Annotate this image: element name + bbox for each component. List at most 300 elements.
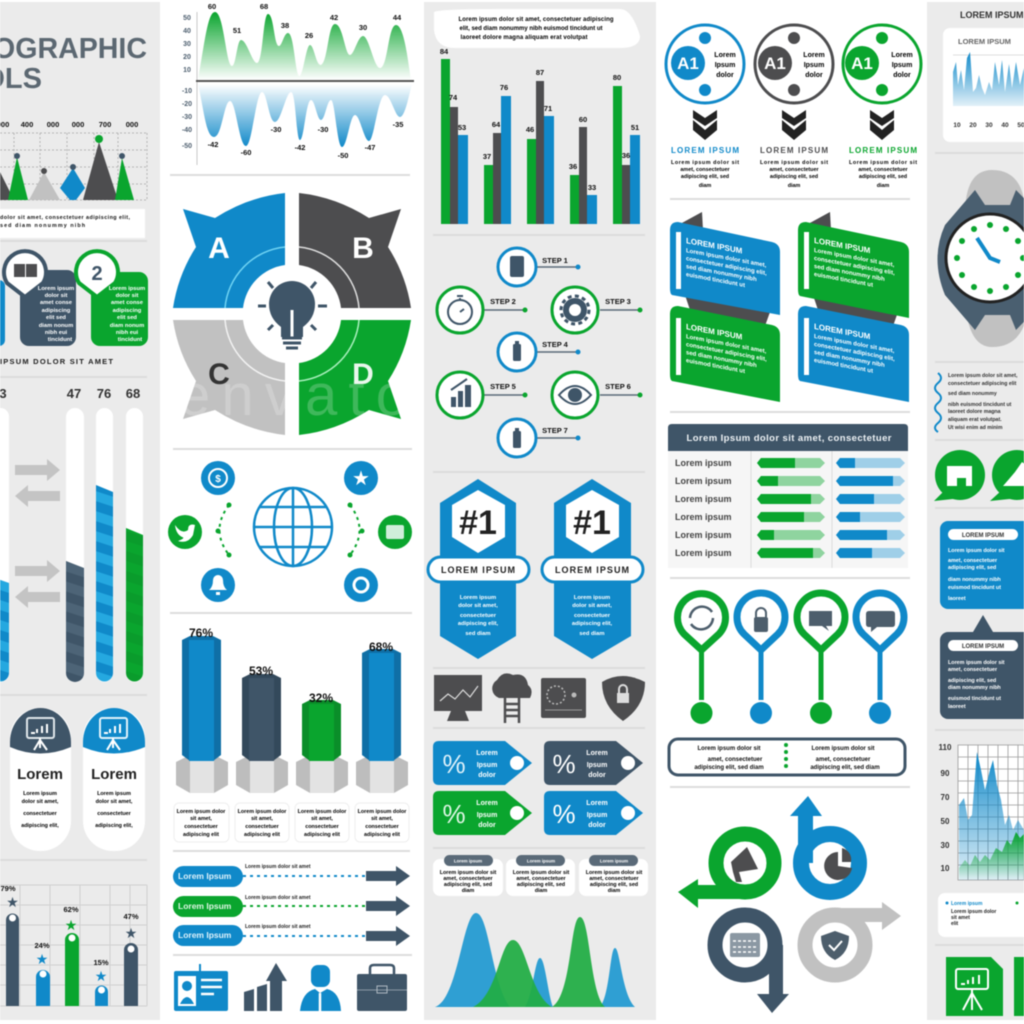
tag: green percent: Ipsum xyxy=(477,812,497,819)
legend card xyxy=(938,893,1024,937)
group 3: 46 xyxy=(526,125,534,134)
ribbon green xyxy=(670,306,780,402)
text block: header note xyxy=(434,9,640,48)
legend card: sit amet xyxy=(951,915,970,921)
column 76%: 76% xyxy=(189,626,213,640)
steps: A1 circle blue: Lorem xyxy=(714,52,736,59)
group 5 xyxy=(613,73,640,224)
pin: comment xyxy=(797,593,845,724)
callout: slate pin card: tincidunt xyxy=(48,337,72,343)
row 3: Lorem Ipsum xyxy=(178,930,232,940)
steps: A1 circle blue: A1 xyxy=(677,54,699,73)
card: slate presentation capsule: dolor sit amet, xyxy=(22,799,59,805)
row 3 xyxy=(173,924,410,946)
tag: green percent: Lorem xyxy=(476,800,498,807)
card 2: diam xyxy=(535,888,547,894)
text blocks: A1 descriptions: adipiscing elit, sed xyxy=(770,174,818,180)
callout: green pin card: 2 xyxy=(91,263,103,285)
card 2: adipiscing elit, sed xyxy=(517,882,565,888)
text blocks: A1 descriptions: amet, consectetuer xyxy=(680,167,730,173)
chart: positive and negative area chart: -10 xyxy=(182,88,192,95)
chart: positive and negative area chart: 30 xyxy=(183,41,191,48)
column 68%: 68% xyxy=(369,640,393,654)
tag: green percent xyxy=(433,791,532,835)
tag: green percent: dolor xyxy=(478,822,496,829)
text cards under columns: Lorem ipsum dolor xyxy=(298,809,347,815)
text blocks: A1 descriptions: LOREM IPSUM xyxy=(671,146,739,155)
chart: triangle peaks with dotted grid: 000 xyxy=(126,120,138,129)
text blocks: A1 descriptions: LOREM IPSUM xyxy=(849,146,917,155)
text cards under columns: consectetuer xyxy=(305,824,340,830)
chart: triangle peaks with dotted grid: 000 xyxy=(72,120,84,129)
group 2: 37 xyxy=(483,152,491,161)
text blocks: A1 descriptions: LOREM IPSUM xyxy=(760,146,828,155)
badge: #1 left: consectetuer xyxy=(460,613,497,619)
callout: slate pin card xyxy=(4,251,76,346)
card 1: Lorem ipsum xyxy=(454,858,482,864)
group 4: 33 xyxy=(588,183,596,192)
group 5: 36 xyxy=(622,151,630,160)
text cards under columns: Lorem ipsum dolor xyxy=(177,809,226,815)
arrows: gray exchange arrows xyxy=(15,459,60,608)
group 4: 60 xyxy=(579,115,587,124)
chart: positive and negative area chart: -50 xyxy=(338,151,348,160)
chart: positive and negative area chart: -30 xyxy=(182,114,192,121)
text block: wavy bullet note xyxy=(935,373,1018,432)
steps: A1 circle gray: A1 xyxy=(764,54,786,73)
icon: briefcase xyxy=(357,965,407,1011)
icon: bird xyxy=(168,515,202,549)
tag: slate percent: dolor xyxy=(588,772,606,779)
row 1 xyxy=(173,864,410,887)
ribbon green: LOREM IPSUM xyxy=(686,322,743,342)
card 3: Lorem ipsum xyxy=(600,858,628,864)
table: progress bars: Lorem ipsum xyxy=(675,530,732,540)
chart: positive and negative area chart xyxy=(182,2,414,165)
tag: blue percent left: dolor xyxy=(478,772,496,779)
watermark: envato: envato xyxy=(178,363,408,428)
text cards under columns xyxy=(174,803,409,842)
callout: blue text box: euismod tincidunt ut xyxy=(948,585,1001,591)
callout: slate text box with pointer: adipiscing elit, sed xyxy=(948,678,996,684)
text block: wavy bullet note: nibh euismod tincidunt ut xyxy=(948,402,1012,408)
text blocks: A1 descriptions: adipiscing elit, sed xyxy=(859,174,907,180)
icon: gear xyxy=(344,568,378,602)
text block: two-column note: Lorem ipsum dolor sit xyxy=(697,746,761,752)
step 1 xyxy=(498,248,580,286)
table: progress bars: Lorem ipsum xyxy=(675,458,732,468)
steps: A1 circle green: Lorem xyxy=(891,52,913,59)
column 53%: 53% xyxy=(249,664,273,678)
text block: two-column note: amet, consectetuer xyxy=(708,757,763,763)
card: slate presentation capsule xyxy=(10,708,71,851)
text blocks: A1 descriptions: Lorem ipsum dolor sit xyxy=(849,160,917,166)
chart card: blue spiky area: 20 xyxy=(969,122,977,129)
heading: ipsum dolor sit amet: IPSUM DOLOR SIT AMET xyxy=(0,357,113,366)
chart: positive and negative area chart: -20 xyxy=(182,101,192,108)
icon: star xyxy=(344,461,378,495)
badge: #1 right xyxy=(542,479,643,659)
card 3: adipiscing elit, sed xyxy=(590,882,638,888)
text block: header note: elit, sed diam nonummy nibh euismod tincidunt ut xyxy=(460,26,602,32)
text blocks: A1 descriptions: Lorem ipsum dolor sit xyxy=(671,160,739,166)
text cards under columns: Lorem ipsum dolor xyxy=(358,809,407,815)
group 2: 76 xyxy=(500,83,508,92)
card 2: Lorem ipsum dolor sit xyxy=(513,870,570,876)
pin: refresh xyxy=(678,594,726,724)
callout: slate text box with pointer: LOREM IPSUM xyxy=(962,644,1004,650)
panel: left column background xyxy=(0,2,160,1020)
group 1: 84 xyxy=(440,47,449,56)
callout: slate pin card: dolor sit xyxy=(45,293,67,299)
icon: green speech bubble with photo xyxy=(990,450,1024,501)
step 4 xyxy=(498,333,580,371)
icon: monitor with line chart xyxy=(434,675,482,721)
heading: right column: LOREM IPSUM xyxy=(960,10,1024,20)
chart: layered area chart on grid: 110 xyxy=(939,743,952,752)
chart: positive and negative area chart: 51 xyxy=(233,26,241,35)
icon: dollar coin: $ xyxy=(215,474,221,485)
ribbon blue: LOREM IPSUM xyxy=(686,236,743,256)
icon: id card xyxy=(174,964,228,1011)
row 2: Lorem Ipsum xyxy=(178,901,232,911)
chart card: blue spiky area: 40 xyxy=(1001,122,1009,129)
segment D xyxy=(299,320,411,435)
chart: positive and negative area chart: 20 xyxy=(183,54,191,61)
steps: A1 circle blue: dolor xyxy=(716,72,734,79)
text block: wavy bullet note: Ut wisi enim ad minim xyxy=(948,425,1003,431)
badge: #1 right: adipiscing elit, xyxy=(572,621,613,627)
column 76% xyxy=(176,626,228,793)
chart: layered area chart on grid: 10 xyxy=(941,864,950,873)
callout: slate text box with pointer: laoreet xyxy=(948,704,966,710)
legend card: elit xyxy=(951,921,959,927)
steps: A1 circle green xyxy=(843,25,921,103)
table: progress bars: Lorem ipsum xyxy=(675,476,732,486)
chart card: blue spiky area: LOREM IPSUM xyxy=(958,37,1011,46)
card: blue presentation capsule: Lorem xyxy=(91,766,137,783)
badge: #1 left: sed diam xyxy=(465,631,491,637)
segment B xyxy=(299,193,411,308)
card 1: adipiscing elit, sed xyxy=(444,882,492,888)
card 2: Lorem ipsum xyxy=(527,858,555,864)
step 7 xyxy=(498,419,580,457)
chart: positive and negative area chart: 42 xyxy=(330,13,338,22)
chart: triangle peaks with dotted grid: 000 xyxy=(47,120,59,129)
tag: slate percent: Lorem xyxy=(586,750,608,757)
group 3: 71 xyxy=(544,104,552,113)
callout: slate text box with pointer: amet, consectetuer xyxy=(948,667,998,673)
text block: two-column note: adipiscing elit, sed diam xyxy=(694,765,764,771)
ribbon blue xyxy=(670,222,780,315)
group 2 xyxy=(483,83,511,224)
chart card: blue spiky area xyxy=(943,28,1024,142)
arrow: blue ring with pie chart xyxy=(790,796,859,892)
steps: A1 circle green: Ipsum xyxy=(892,62,912,69)
card 1: diam xyxy=(462,888,474,894)
chart: overlapping bell curves xyxy=(435,913,635,1007)
ribbon blue: sed diam nonummy nibh xyxy=(814,350,885,369)
pin: padlock xyxy=(737,593,785,724)
text block: header note: laoreet dolore magna aliquam erat volutpat xyxy=(460,35,588,41)
text block: chart caption: dolor sit amet, consectetuer adipiscing elit, xyxy=(0,215,130,221)
group 5: 80 xyxy=(613,73,621,82)
text block: wavy bullet note: laoreet dolore magna xyxy=(948,409,1001,415)
group 3: 87 xyxy=(536,68,544,77)
text block: two-column note: adipiscing elit, sed diam xyxy=(810,765,880,771)
chart: triangle peaks with dotted grid: 400 xyxy=(21,120,33,129)
text blocks: A1 descriptions: diam xyxy=(877,183,889,189)
arrow: slate ring with calendar xyxy=(715,915,789,1013)
text cards under columns: sit amet, xyxy=(371,816,393,822)
step 6 xyxy=(552,372,642,418)
text cards under columns: sit amet, xyxy=(251,816,273,822)
steps: A1 circle gray: dolor xyxy=(805,72,823,79)
group 3 xyxy=(526,68,554,224)
badge: #1 left: Lorem ipsum xyxy=(460,595,496,601)
segment A: A xyxy=(208,232,230,265)
tag: slate percent xyxy=(544,741,643,785)
chart: star lollipop bars: 79% xyxy=(0,884,16,893)
steps: A1 circle gray: Lorem xyxy=(803,52,825,59)
icon: envelope xyxy=(378,515,412,549)
callout: blue text box: amet, consectetuer xyxy=(948,558,998,564)
ribbon blue: consectetuer adipiscing elit, xyxy=(814,342,895,363)
chart: layered area chart on grid: 30 xyxy=(941,841,950,850)
segment D: D xyxy=(352,358,374,391)
callout: green pin card: tincidunt xyxy=(118,337,142,343)
callout: slate pin card: adipiscing xyxy=(42,308,71,314)
ribbon blue xyxy=(798,306,909,402)
callout: green pin card: adipiscing xyxy=(113,308,142,314)
card 1: amet, consectetuer xyxy=(443,876,493,882)
chart: positive and negative area chart: 40 xyxy=(183,28,191,35)
tag: blue percent right xyxy=(544,791,643,835)
text cards under columns: sit amet, xyxy=(311,816,333,822)
ribbon green: Lorem ipsum dolor sit amet, xyxy=(686,334,767,355)
table: progress bars xyxy=(668,424,908,568)
icon: safe xyxy=(541,678,586,718)
tag: green percent: % xyxy=(442,799,466,829)
chart: star lollipop bars: 15% xyxy=(93,958,109,967)
step 5 xyxy=(437,372,528,418)
chart: hexagonal 3D columns xyxy=(176,626,408,793)
diagram: numbered steps xyxy=(437,248,642,457)
ribbon blue: consectetuer adipiscing elit, xyxy=(686,256,767,277)
ribbon blue: Lorem ipsum dolor sit amet, xyxy=(814,334,895,355)
step 1: STEP 1 xyxy=(542,256,568,265)
tag: blue percent left: Lorem xyxy=(476,750,498,757)
ribbon green: LOREM IPSUM xyxy=(814,236,871,255)
icon: light bulb xyxy=(258,281,327,348)
ribbon blue: Lorem ipsum dolor sit amet, xyxy=(686,248,767,269)
card: slate presentation capsule: adipiscing elit, xyxy=(21,823,59,829)
card: blue presentation capsule: adipiscing elit, xyxy=(95,823,133,829)
text cards under columns: consectetuer xyxy=(245,824,280,830)
chart card: blue spiky area: 10 xyxy=(953,122,961,129)
icon: cloud with ladder xyxy=(492,673,532,723)
card: blue presentation capsule: consectetuer xyxy=(97,811,132,817)
icon: globe with social icons xyxy=(168,461,412,602)
chart: positive and negative area chart: -47 xyxy=(365,143,375,152)
card 3: amet, consectetuer xyxy=(589,876,639,882)
chart: triangle peaks with dotted grid xyxy=(0,120,147,200)
text blocks: A1 descriptions: Lorem ipsum dolor sit xyxy=(760,160,828,166)
text block: chart caption xyxy=(0,209,145,238)
callout: slate pin card: diam nonum xyxy=(39,323,73,329)
panel: right column background xyxy=(927,2,1024,1020)
steps: A1 circle green: dolor xyxy=(893,72,911,79)
card 3: Lorem ipsum dolor sit xyxy=(586,870,643,876)
group 5: 51 xyxy=(631,123,639,132)
chart: positive and negative area chart: 68 xyxy=(260,2,268,11)
pin: chat xyxy=(856,593,904,724)
callout: blue text box xyxy=(940,521,1024,609)
chart card: blue spiky area: 30 xyxy=(985,122,993,129)
text cards under columns: Lorem ipsum dolor xyxy=(238,809,287,815)
chart: star lollipop bars: 62% xyxy=(63,905,79,914)
text block: wavy bullet note: Lorem ipsum dolor sit amet, xyxy=(948,373,1018,379)
row 2: Lorem ipsum dolor sit amet xyxy=(245,895,311,901)
callout: blue text box: diam nonummy nibh xyxy=(948,577,1001,583)
callout: green pin card: Lorem ipsum xyxy=(109,286,145,292)
callout: slate pin card: amet conse xyxy=(40,300,73,306)
callout: green pin card: nibh eui xyxy=(116,330,138,336)
ribbon blue: sed diam nonummy nibh xyxy=(686,264,757,283)
badge: #1 right: dolor sit amet, xyxy=(572,603,612,609)
column 53% xyxy=(236,664,288,793)
badge: #1 left: dolor sit amet, xyxy=(458,603,498,609)
chart: positive and negative area chart: 44 xyxy=(393,13,402,22)
chart: striped vertical tubes: 68 xyxy=(126,386,140,401)
chart: positive and negative area chart: 60 xyxy=(208,2,216,11)
chart: layered area chart on grid xyxy=(939,743,1024,880)
chart: striped vertical tubes: 76 xyxy=(97,386,111,401)
callout: slate pin card: elit sed xyxy=(46,315,66,321)
segment C: C xyxy=(208,358,230,391)
icon: star: ★ xyxy=(352,468,370,490)
badge: #1 left: LOREM IPSUM xyxy=(441,565,515,575)
card: blue presentation capsule xyxy=(83,708,145,851)
icon: bell xyxy=(201,568,235,602)
ribbon green xyxy=(798,222,909,318)
group 1: 53 xyxy=(458,123,466,132)
chart: layered area chart on grid: 70 xyxy=(941,793,950,802)
card 1 xyxy=(433,855,503,896)
step 7: STEP 7 xyxy=(542,426,568,435)
text blocks: A1 descriptions: adipiscing elit, sed xyxy=(681,174,729,180)
callout: slate pin card: nibh eui xyxy=(45,330,67,336)
text block: wavy bullet note: consectetuer adipiscing elit xyxy=(948,381,1017,387)
callout: slate text box with pointer: diam nonummy nibh xyxy=(948,685,1001,691)
chart: positive and negative area chart: -30 xyxy=(318,125,328,134)
chart: positive and negative area chart: -42 xyxy=(295,143,305,152)
group 2: 64 xyxy=(492,120,501,129)
column 32% xyxy=(296,691,348,793)
table: progress bars: Lorem ipsum xyxy=(675,548,732,558)
callout: blue text box: adipiscing elit, sed xyxy=(948,565,996,571)
icon: green speech bubble with store xyxy=(934,450,985,501)
chart: star lollipop bars: ★ xyxy=(36,951,48,967)
callout: green pin card: amet conse xyxy=(111,300,144,306)
row 2 xyxy=(173,895,410,917)
badge: #1 left: #1 xyxy=(459,504,497,542)
callout: blue text box: LOREM IPSUM xyxy=(962,533,1004,539)
callout: green pin card: dolor sit xyxy=(116,293,138,299)
tag: blue percent right: % xyxy=(552,799,576,829)
step 5: STEP 5 xyxy=(490,382,516,391)
column 68% xyxy=(356,640,408,793)
steps: A1 circle gray: Ipsum xyxy=(804,62,824,69)
callout: green pin card: elit sed xyxy=(117,315,137,321)
icon: wrist watch xyxy=(938,170,1024,347)
step 2: STEP 2 xyxy=(490,297,516,306)
callout: blue text box: Lorem ipsum dolor sit xyxy=(948,548,1005,554)
chart: positive and negative area chart: 50 xyxy=(183,15,191,22)
icon: business person xyxy=(300,965,341,1011)
text blocks: A1 descriptions xyxy=(671,146,917,189)
chart: star lollipop bars: 47% xyxy=(123,912,139,921)
text cards under columns: consectetuer xyxy=(184,824,219,830)
chart: star lollipop bars: ★ xyxy=(65,917,77,933)
group 4: 36 xyxy=(569,162,577,171)
steps: A1 circle gray xyxy=(755,25,833,103)
icon: green document cropped xyxy=(1014,957,1024,1016)
badge: #1 left: adipiscing elit, xyxy=(458,621,499,627)
step 2 xyxy=(437,287,528,333)
ribbon green: sed diam nonummy nibh xyxy=(686,350,757,369)
card 3: diam xyxy=(608,888,620,894)
column 32%: 32% xyxy=(309,691,333,705)
text block: header note: Lorem ipsum dolor sit amet, consectetuer adipiscing xyxy=(458,17,614,23)
text block: chart caption: sed diam nonummy nibh xyxy=(0,223,85,229)
tag: blue percent right: dolor xyxy=(588,822,606,829)
text cards under columns: adipiscing elit xyxy=(364,832,400,838)
ribbons: left pair xyxy=(670,212,780,402)
callout: green pin card xyxy=(76,251,148,346)
card: slate presentation capsule: consectetuer xyxy=(23,811,58,817)
callout: slate text box with pointer: euismod tincidunt ut xyxy=(948,696,1001,702)
segment B: B xyxy=(352,232,374,265)
chart: positive and negative area chart: 26 xyxy=(305,31,313,40)
ribbons: right pair xyxy=(798,212,909,402)
row 1: Lorem ipsum dolor sit amet xyxy=(245,864,311,870)
text blocks: A1 descriptions: diam xyxy=(788,183,800,189)
steps: A1 circle green: A1 xyxy=(851,54,873,73)
tag: blue percent right: Lorem xyxy=(586,800,608,807)
card: blue presentation capsule: dolor sit amet, xyxy=(96,799,133,805)
segment C xyxy=(173,320,285,435)
chart: striped vertical tubes: 47 xyxy=(67,386,81,401)
row 1: Lorem Ipsum xyxy=(178,871,232,881)
tag: slate percent: Ipsum xyxy=(587,762,607,769)
tag: blue percent left: % xyxy=(442,749,466,779)
chart: grouped bars xyxy=(440,47,640,224)
diagram: ABCD pinwheel xyxy=(173,193,411,435)
callout: green pin card: diam nonum xyxy=(110,323,144,329)
chart: positive and negative area chart: 30 xyxy=(359,23,367,32)
card 2 xyxy=(506,855,575,896)
ribbon green: euismod tincidunt ut xyxy=(814,272,873,289)
text cards under columns: adipiscing elit xyxy=(183,832,219,838)
step 6: STEP 6 xyxy=(605,382,631,391)
chart: star lollipop bars: ★ xyxy=(6,894,19,910)
chart: star lollipop bars: ★ xyxy=(95,968,107,984)
badge: #1 right: LOREM IPSUM xyxy=(555,565,629,575)
icon: green document with presentation xyxy=(946,957,1003,1016)
chart: positive and negative area chart: -40 xyxy=(182,127,192,134)
chart: layered area chart on grid: 90 xyxy=(941,769,950,778)
